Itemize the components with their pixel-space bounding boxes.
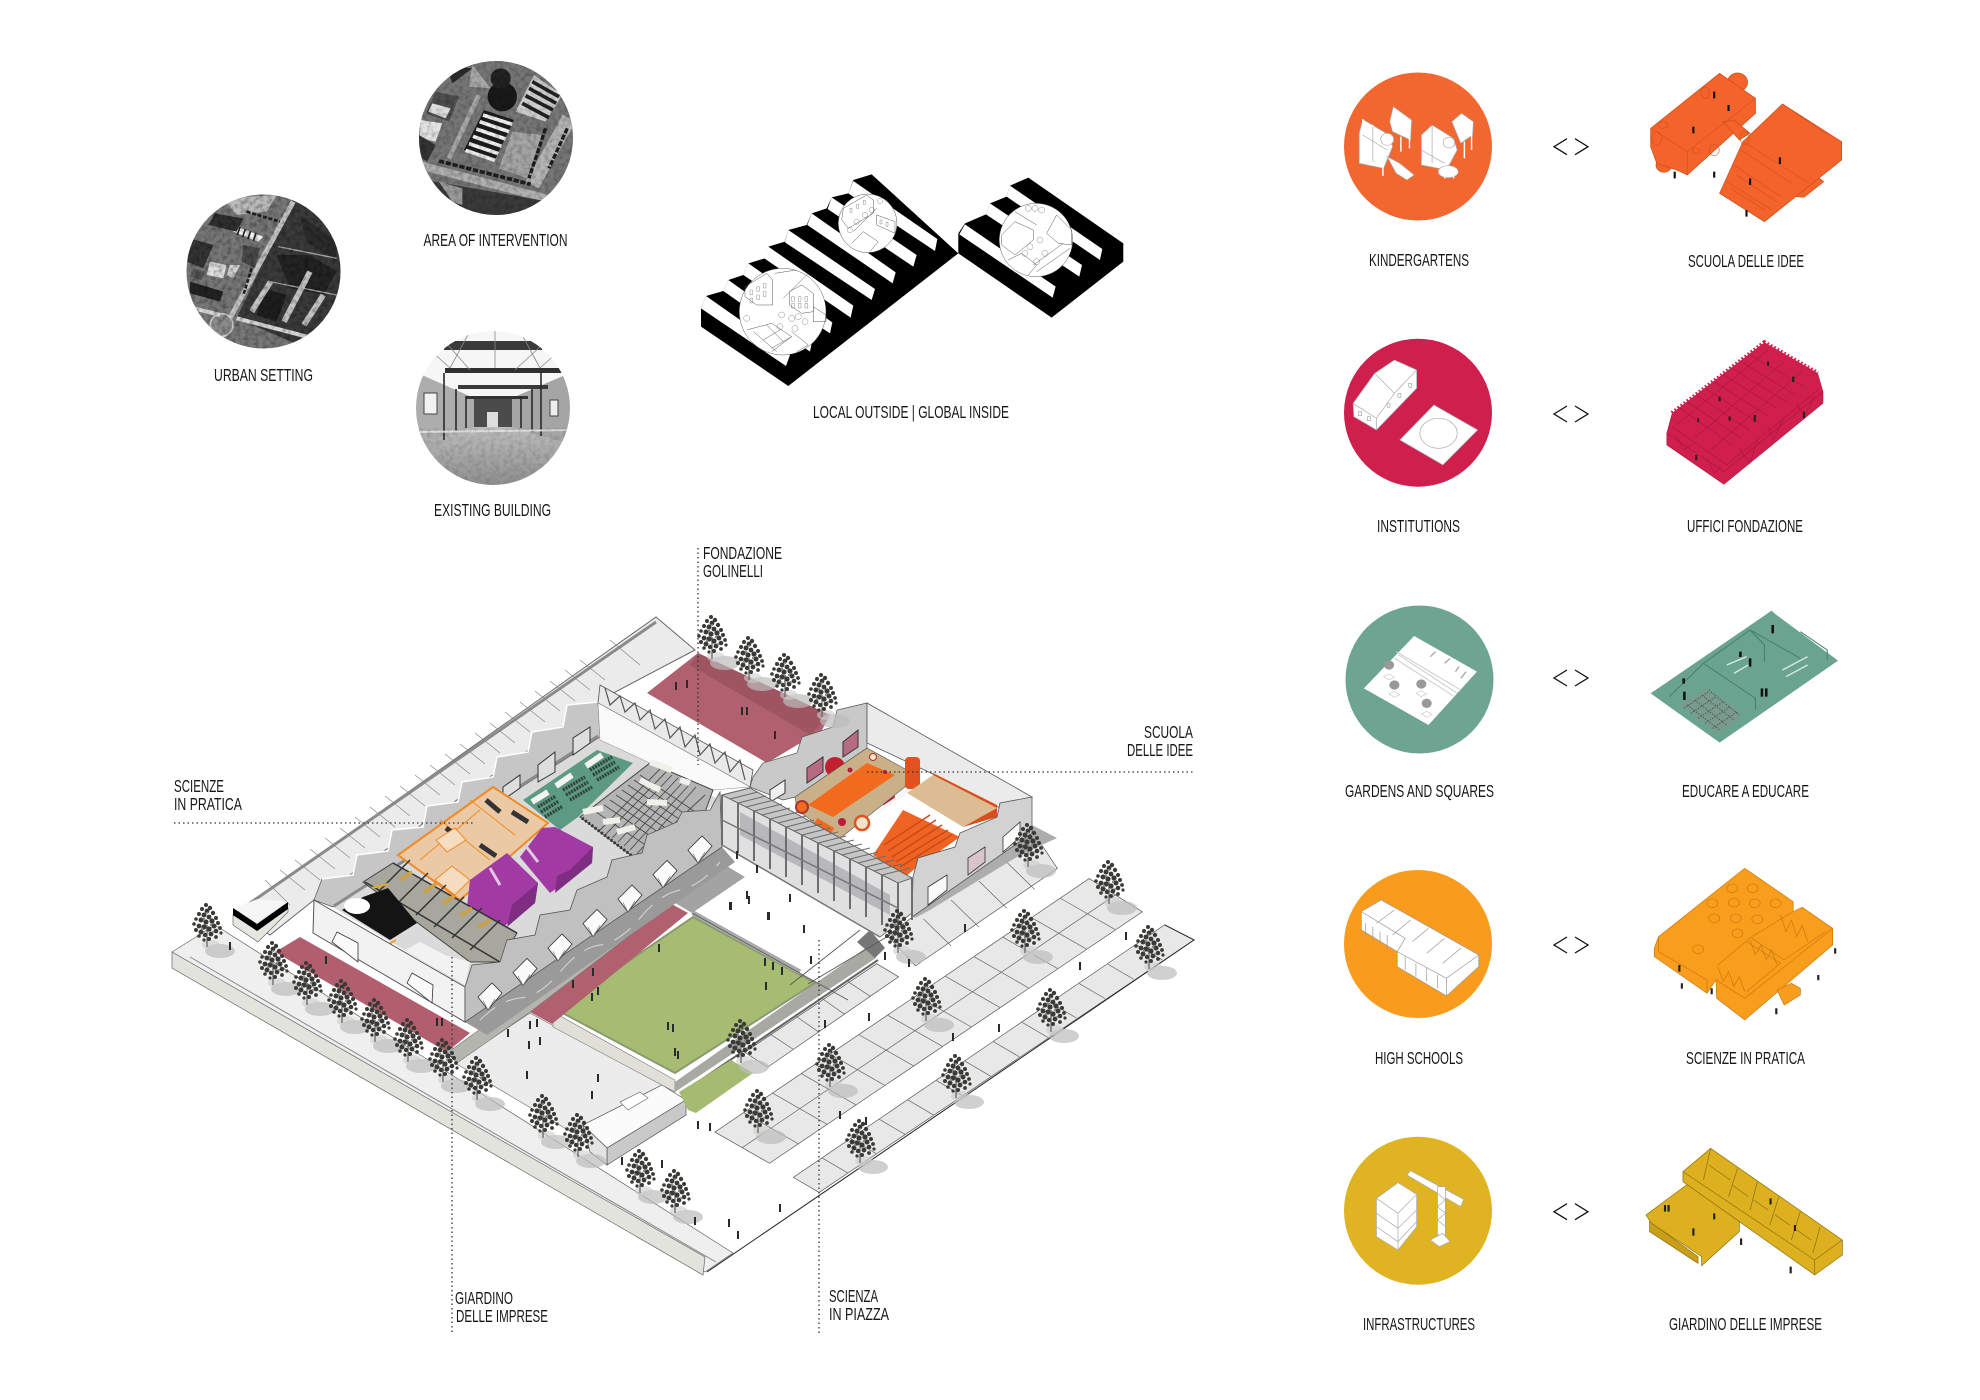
label: giardino delle imprese: DELLE IMPRESE <box>456 1306 548 1326</box>
arrows <box>1554 1204 1588 1220</box>
arrows <box>1554 937 1588 953</box>
label: urban setting: URBAN SETTING <box>214 365 313 385</box>
icon: palazzo and square <box>1353 360 1478 465</box>
interior: light orange volume <box>398 787 548 900</box>
label: fondazione golinelli <box>703 543 782 581</box>
scuola: orange stairs <box>873 810 960 877</box>
label: local outside global inside: LOCAL OUTSIDE | GLOBAL INSIDE <box>813 402 1009 422</box>
low white pavilion <box>583 1085 686 1165</box>
label: infrastructures: INFRASTRUCTURES <box>1363 1314 1475 1334</box>
scuola: orange tower <box>905 757 920 789</box>
leader: scienze <box>174 822 475 824</box>
label: educare a educare: EDUCARE A EDUCARE <box>1682 781 1809 801</box>
label: area of intervention: AREA OF INTERVENTION <box>424 230 568 250</box>
label: high schools: HIGH SCHOOLS <box>1375 1048 1463 1068</box>
icon: scaffold cube and crane <box>1376 1171 1464 1250</box>
interior: green auditorium floor <box>523 750 633 830</box>
inset circle: street scene right <box>999 203 1073 277</box>
interior: grey rooms row <box>363 860 517 962</box>
row 3: gardens and squares <box>1345 606 1838 801</box>
back sawtooth wall <box>314 702 600 907</box>
label: giardino delle imprese <box>455 1288 548 1326</box>
dark paving <box>670 862 745 913</box>
photo circle: existing building interior <box>415 331 572 486</box>
south-east sawtooth facade <box>465 792 722 1022</box>
white stripes <box>701 181 1102 366</box>
label: gardens and squares: GARDENS AND SQUARES <box>1345 781 1494 801</box>
retaining wall <box>447 895 672 1063</box>
inset circle: street scene top <box>838 194 897 253</box>
icon: playground structures <box>1359 107 1473 180</box>
top-left roof strip <box>237 617 695 935</box>
photo circle: urban setting <box>186 194 347 349</box>
pergola bridge <box>722 788 912 937</box>
label: institutions: INSTITUTIONS <box>1377 516 1460 536</box>
gatehouse black roof <box>233 899 288 942</box>
east gable front <box>750 703 867 802</box>
building: scuola delle idee <box>1651 73 1842 222</box>
east back wall <box>867 703 1032 808</box>
row 2: institutions <box>1344 339 1823 536</box>
icon: infrastructures circle <box>1344 1137 1492 1285</box>
icon: institutions circle <box>1344 339 1492 487</box>
red garden west <box>275 937 470 1052</box>
label: scienza in piazza: SCIENZA <box>829 1286 878 1306</box>
interior: black floor with cylinder <box>342 884 417 948</box>
interior: mechanical grid <box>580 762 713 862</box>
label: uffici fondazione: UFFICI FONDAZIONE <box>1687 516 1803 536</box>
row 4: high schools <box>1344 868 1835 1068</box>
icon: high schools circle <box>1344 870 1492 1018</box>
west gable wall <box>313 900 465 1022</box>
truss gallery and hall <box>598 685 753 790</box>
leader: scuola <box>867 771 1194 773</box>
building: giardino delle imprese <box>1646 1148 1842 1275</box>
label: existing building: EXISTING BUILDING <box>434 500 551 520</box>
label: scuola delle idee: SCUOLA <box>1144 722 1193 742</box>
scuola: beige box with orange floor <box>795 748 910 840</box>
label: scuola delle idee: SCUOLA DELLE IDEE <box>1688 251 1804 271</box>
roof block left <box>701 174 958 386</box>
leader: scienza <box>818 940 820 1333</box>
kerb and sidewalk <box>172 925 733 1275</box>
east facade <box>912 797 1032 917</box>
icon: kindergartens circle <box>1344 72 1492 220</box>
label: scienza in piazza: IN PIAZZA <box>829 1304 889 1324</box>
top red garden <box>647 653 830 763</box>
roof block right <box>958 178 1123 318</box>
building: scienze in pratica <box>1654 868 1835 1020</box>
scuola: beige roof <box>907 773 997 827</box>
row 1: kindergartens <box>1344 72 1842 271</box>
arrows <box>1554 670 1588 686</box>
label: scuola delle idee <box>1127 722 1193 760</box>
axonometric site plan <box>172 615 1194 1275</box>
building: uffici fondazione <box>1667 343 1823 484</box>
interior: white floor <box>405 942 470 985</box>
label: kindergartens: KINDERGARTENS <box>1369 250 1469 270</box>
people <box>230 680 1126 1239</box>
icon: gardens circle <box>1346 606 1494 754</box>
trees <box>192 615 1177 1224</box>
paved forecourt <box>455 1013 662 1133</box>
ground shadow of east building <box>912 825 1057 918</box>
lawn and side walls <box>553 913 878 1113</box>
leader: giardino <box>451 957 453 1333</box>
label: scienze in pratica: SCIENZE IN PRATICA <box>1686 1048 1805 1068</box>
row 5: infrastructures <box>1344 1137 1842 1334</box>
label: giardino delle imprese: GIARDINO DELLE IMPRESE <box>1669 1314 1822 1334</box>
leader: fondazione <box>697 548 699 765</box>
striped stepped roof diagram <box>701 174 1123 386</box>
label: fondazione golinelli: GOLINELLI <box>703 561 763 581</box>
stairs <box>857 930 885 958</box>
shadow band under facade <box>465 847 735 1035</box>
interior: purple volumes <box>467 827 593 927</box>
label: scienze in pratica: IN PRATICA <box>174 794 242 814</box>
arrows <box>1554 406 1588 422</box>
photo circle: area of intervention <box>417 60 575 218</box>
icon: garden plan <box>1364 636 1477 725</box>
paved strips with tile grid <box>707 827 1194 1274</box>
label: fondazione golinelli: FONDAZIONE <box>703 543 782 563</box>
arrows <box>1554 139 1588 155</box>
label: scienze in pratica: SCIENZE <box>174 776 224 796</box>
building: educare a educare <box>1651 611 1838 743</box>
label: scuola delle idee: DELLE IDEE <box>1127 740 1193 760</box>
red walkway along lawn <box>530 902 688 1024</box>
inset circle: street scene left <box>739 268 826 355</box>
yard lines <box>692 913 890 1000</box>
label: scienze in pratica <box>174 776 242 814</box>
interior floor <box>333 737 720 987</box>
label: giardino delle imprese: GIARDINO <box>455 1288 513 1308</box>
icon: school blocks <box>1361 900 1479 996</box>
label: scienza in piazza <box>829 1286 889 1324</box>
